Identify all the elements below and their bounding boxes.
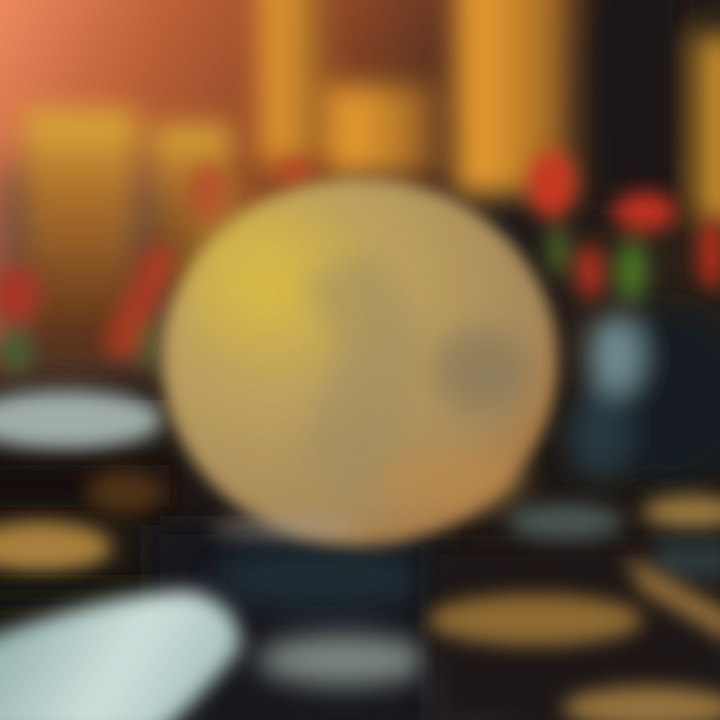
candlesticks: upper orange bars [260, 0, 720, 225]
stack: dark gap [0, 465, 170, 507]
left stack of coins [0, 390, 200, 608]
stack: gold coin edge [0, 521, 112, 573]
candlesticks: red and green accents [0, 151, 720, 374]
coin: engraved vertical ridge [300, 250, 420, 500]
right: top gold coin [642, 495, 720, 529]
bottom centre dark pedestal [150, 525, 520, 720]
right: grey coin [507, 504, 623, 540]
right stack of coins [427, 495, 720, 720]
coin: lower rim shade [375, 448, 525, 512]
right: wide gold coin [427, 594, 643, 646]
coin: engraved right [432, 328, 528, 412]
coin: bright highlight [190, 210, 310, 330]
right: bottom gold coin [562, 686, 720, 720]
stack: brown glow [85, 470, 165, 514]
bottom left pale glass shape [0, 590, 240, 720]
gold coin sphere [162, 178, 558, 546]
right: teal coin [655, 540, 720, 580]
stack: dark base [0, 582, 200, 608]
stack: grey band [0, 390, 163, 450]
right: slanted gold coin [625, 555, 720, 645]
dark sphere at right [568, 305, 720, 485]
coin: pale seat [210, 520, 360, 536]
candlesticks: left orange bars [24, 110, 232, 360]
